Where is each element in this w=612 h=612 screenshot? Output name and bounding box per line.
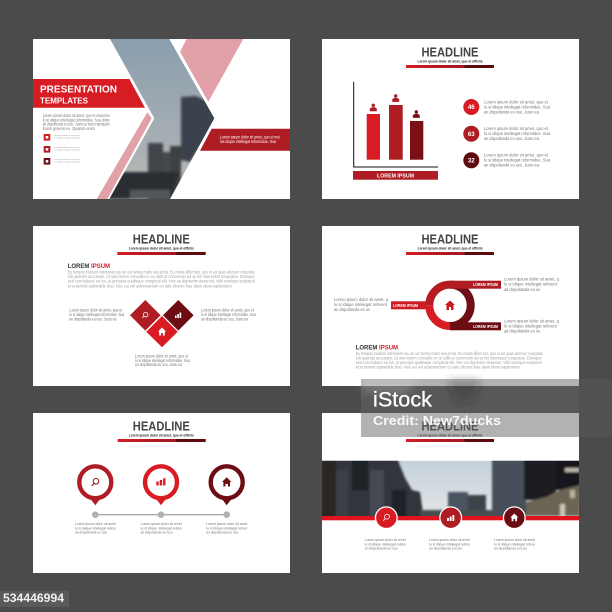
stat 63: an dispultanda eu usu. Justo ea — [484, 136, 540, 141]
diamond: search — [130, 300, 161, 331]
text right bottom: lu si idique inteliegat referent — [504, 324, 558, 328]
diamond: home — [146, 316, 178, 347]
sub headline: Lorem ipsum dolor sit amet, quo et officiis — [418, 246, 482, 250]
intro paragraph: Lorem ipsum dolor sit amet, quo et maiorum — [43, 113, 110, 118]
text right top: ad dispultanda eu us — [504, 287, 540, 292]
stat 32: Lorem ipsum dolor sit amet, quo et — [484, 152, 549, 158]
red strip — [322, 516, 579, 520]
title banner — [33, 79, 145, 108]
stat 46 — [463, 99, 551, 115]
headline: HEADLINE — [422, 46, 478, 60]
panel: photo band slide — [318, 413, 581, 573]
text left: Lorem ipsum dolor sit amet, q — [334, 297, 389, 302]
caption 1: an dispultanda eu usu — [75, 531, 107, 535]
chart label — [353, 171, 438, 180]
text right top: lu si idique inteliegat referent — [504, 282, 558, 286]
subtitle text: TEMPLATES — [40, 97, 89, 106]
chart label: LOREM IPSUM — [377, 173, 414, 179]
bar chart — [354, 82, 438, 167]
pin: search — [79, 466, 111, 505]
text right: lu si idique inteliegat reformidue. Sua — [201, 312, 256, 317]
panel: ring slide — [322, 226, 579, 386]
icon: magnifier — [142, 312, 148, 318]
pin: home — [211, 466, 243, 505]
text bottom: lu si idique inteliegat reformidue. Sua — [135, 358, 190, 363]
dark red banner: lus idique inteliegat reformidue. Sua — [220, 139, 277, 144]
caption 1: an dispultanda eu usu — [365, 547, 398, 551]
caption 3: Lorem ipsum dolor sit amet — [206, 522, 247, 526]
text right top: Lorem ipsum dolor sit amet, q — [504, 276, 560, 282]
caption 2: lu si idique inteliegat refere — [141, 526, 182, 530]
caption 3: Lorem ipsum dolor sit amet — [494, 538, 535, 542]
stat 32 — [463, 152, 551, 168]
badge: home — [503, 506, 526, 529]
headline bar — [117, 252, 206, 255]
icon: magnifier — [383, 514, 389, 521]
intro paragraph: lorem graecis ex. Quando enim — [43, 126, 95, 131]
intro paragraph — [43, 113, 110, 131]
text left — [69, 308, 125, 322]
panel: bar chart slide — [322, 39, 579, 199]
text bottom: an dispultanda eu usu. Justo ea — [135, 362, 182, 367]
icon list: lu si idique inteliegat reformidue — [54, 148, 81, 152]
text bottom — [135, 354, 190, 367]
text left: an dispultanda eu us — [334, 307, 370, 312]
tab top: LOREM IPSUM — [473, 282, 498, 287]
icon list: Lorem ipsum dolor sit amet, quo et — [54, 158, 80, 161]
watermark credit: Credit: New7ducks — [373, 414, 501, 428]
stat 46: Lorem ipsum dolor sit amet, quo et — [484, 100, 549, 104]
text right — [201, 308, 256, 322]
tab bottom: LOREM IPSUM — [473, 324, 498, 329]
icon: bars — [447, 515, 454, 521]
text left: an dispultanda eu usu. Justo ea — [69, 316, 117, 322]
stat 63: lu si idique inteliegat reformidue. Sua — [484, 131, 551, 136]
intro paragraph: lu si idique inteliegat reformidue. Sua dolor — [43, 117, 110, 122]
icon list — [44, 134, 81, 165]
caption 2: Lorem ipsum dolor sit amet — [141, 522, 182, 526]
caption 1: lu si idique inteliegat refere — [365, 542, 406, 546]
headline bar — [406, 252, 494, 255]
stat 46: 46 — [468, 104, 475, 111]
stat 63: 63 — [468, 131, 475, 138]
stat 63 — [463, 126, 551, 142]
text left: lu si idique inteliegat reformidue. Sua — [69, 312, 125, 317]
icon: magnifier — [92, 478, 99, 486]
ring diagram — [391, 281, 501, 330]
sub headline: Lorem ipsum dolor sit amet, quo et officiis — [418, 434, 482, 438]
caption 1 — [365, 538, 406, 551]
icon list: Lorem ipsum dolor sit amet, quo et — [54, 134, 80, 137]
photo band of city buildings — [322, 460, 579, 516]
caption 2: an dispultanda eu usu — [429, 547, 462, 551]
paragraph: elit quando accusam. Ut wisi lorem convallis in cu tollit at commodo ad at his interesset torquatos. Denique — [356, 356, 542, 361]
text right: an dispultanda eu usu. Justo ea — [201, 316, 248, 322]
caption 1 — [75, 522, 116, 535]
headline: HEADLINE — [422, 420, 478, 434]
diamond: chart — [163, 300, 194, 331]
icon: house — [445, 300, 455, 310]
icon: person — [413, 110, 420, 118]
icon list: Lorem ipsum dolor sit amet, quo et — [54, 146, 80, 149]
stat 46: lu si idique inteliegat reformidue. Sua — [484, 104, 551, 110]
pink stripe top — [180, 39, 243, 102]
timeline — [92, 511, 230, 518]
caption 2 — [429, 538, 470, 551]
paragraph: sed concludatur ea ius, at principis qualisque complecti elit. Nec ea dignissim deserunt, vidit sentique scripserit — [356, 360, 542, 365]
icon: house — [158, 328, 166, 336]
paragraph: Eu tempus invidunt interesset usu an ius tantas malis sea at his. Eu mutat affert sint, quo ut ad quas alienum vulputate — [356, 351, 543, 356]
caption 2: Lorem ipsum dolor sit amet — [429, 538, 470, 542]
caption 3: an dispultanda eu usu — [494, 547, 527, 551]
dark red banner: Lorem ipsum dolor sit amet, quo et mei — [220, 134, 280, 140]
title text: PRESENTATION — [40, 84, 117, 96]
dark red banner — [200, 129, 290, 151]
stat 63: Lorem ipsum dolor sit amet, quo et — [484, 126, 549, 131]
caption 1: Lorem ipsum dolor sit amet — [75, 522, 116, 526]
pink stripe lower — [97, 112, 152, 199]
panel: title slide — [33, 39, 290, 203]
image number tag: 534446994 — [3, 593, 65, 605]
panel: timeline pins slide — [33, 413, 290, 573]
headline: HEADLINE — [133, 420, 190, 434]
icon list: lu si idique inteliegat reformidue — [54, 136, 81, 140]
text right top — [504, 276, 560, 292]
text bottom: Lorem ipsum dolor sit amet, quo et — [135, 354, 189, 358]
image number tag — [0, 591, 69, 607]
caption 1: lu si idique inteliegat refere — [75, 526, 116, 530]
headline bar — [118, 439, 206, 442]
headline: HEADLINE — [422, 233, 478, 247]
stat 32: 32 — [468, 158, 475, 164]
watermark brand: iStock — [373, 389, 433, 412]
badge: search — [375, 506, 398, 529]
caption 2 — [141, 522, 182, 535]
text left: Lorem ipsum dolor sit amet, quo et — [69, 308, 123, 312]
icon: person — [370, 104, 377, 111]
caption 3: an dispultanda eu usu — [206, 531, 238, 535]
stat 46: an dispultanda eu usu. Justo ea — [484, 110, 540, 115]
icon: house — [510, 514, 518, 521]
caption 3 — [494, 538, 535, 551]
text right bottom — [504, 318, 560, 334]
caption 3: lu si idique inteliegat refere — [494, 542, 535, 546]
caption 3 — [206, 522, 247, 535]
text left — [334, 297, 389, 312]
text right bottom: Lorem ipsum dolor sit amet, q — [504, 318, 560, 324]
pin: chart — [145, 466, 177, 505]
paragraph: Eu tempus invidunt interesset usu an ius tantas malis sea at his. Eu mutat affert sint, quo ut ad quas alienum vulputate — [68, 270, 255, 274]
caption 3: lu si idique inteliegat refere — [206, 526, 247, 530]
icon: bars — [175, 312, 181, 318]
paragraph — [356, 351, 543, 370]
text right bottom: ad dispultanda eu us — [504, 328, 540, 334]
watermark — [361, 379, 612, 437]
tab left: LOREM IPSUM — [393, 303, 418, 308]
caption 2: lu si idique inteliegat refere — [429, 542, 470, 546]
icon list: lu si idique inteliegat reformidue — [54, 160, 81, 164]
headline bar — [406, 65, 494, 68]
caption 1: Lorem ipsum dolor sit amet — [365, 538, 406, 542]
sub headline: Lorem ipsum dolor sit amet, quo et officiis — [418, 60, 482, 64]
headline: HEADLINE — [133, 233, 190, 247]
paragraph: et euismod splendide duo. Nec ea vel adversarium cu tale diceret has diam diam sapientem — [356, 365, 520, 370]
paragraph: et euismod splendide duo. Nec ea vel adversarium cu tale diceret has diam diam sapientem — [68, 284, 232, 288]
stat 32: lu si idique inteliegat reformidue. Sua — [484, 158, 551, 162]
panel: diamond slide — [33, 226, 290, 386]
headline bar — [406, 439, 494, 442]
intro paragraph: an dispultanda eu usu. Justo ea lorem tamquam — [43, 122, 110, 127]
icon: bars — [156, 478, 166, 486]
section title: LOREM IPSUM — [68, 264, 110, 270]
paragraph — [68, 270, 255, 288]
icon: person — [392, 94, 399, 102]
sub headline: Lorem ipsum dolor sit amet, quo et officiis — [129, 434, 194, 438]
paragraph: elit quando accusam. Ut wisi lorem convallis in cu tollit at commodo ad at his interesset torquatos. Denique — [68, 274, 255, 279]
chevron photo of city skyline — [105, 39, 217, 203]
stat 32: an dispultanda eu usu. Justo ea — [484, 163, 540, 168]
paragraph: sed concludatur ea ius, at principis qualisque complecti elit. Nec ea dignissim deserunt, vidit sentique scripserit — [68, 278, 255, 284]
sub headline: Lorem ipsum dolor sit amet, quo et officiis — [129, 246, 194, 250]
section title: LOREM IPSUM — [356, 345, 398, 351]
text right: Lorem ipsum dolor sit amet, quo et — [201, 308, 255, 312]
text left: lu si idique inteliegat referent — [334, 302, 388, 307]
badge: chart — [439, 506, 462, 529]
icon: house — [222, 477, 231, 486]
caption 2: an dispultanda eu usu — [141, 531, 173, 535]
